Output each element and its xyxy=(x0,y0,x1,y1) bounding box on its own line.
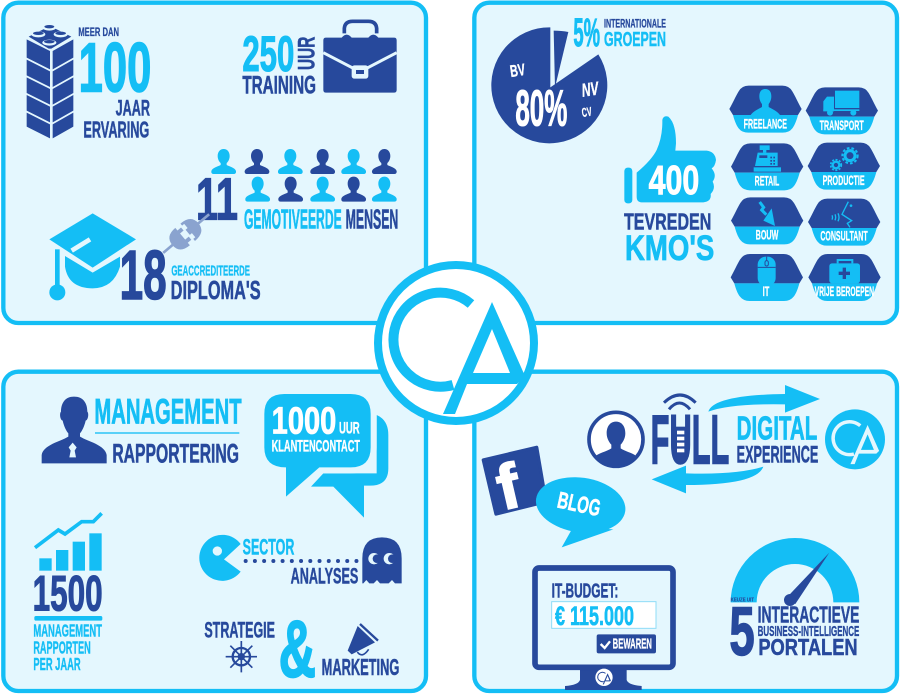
panel: digital xyxy=(474,372,897,691)
text: digital experience: EXPERIENCE xyxy=(737,442,818,469)
chart: pie of company types xyxy=(491,27,607,143)
icon: graduation cap xyxy=(49,213,136,300)
tile: freelance: FREELANCE xyxy=(744,115,787,131)
text: 5% internationale groepen: INTERNATIONALE xyxy=(604,16,666,30)
icon: ship wheel xyxy=(226,641,257,672)
text: 100 jaar ervaring: ERVARING xyxy=(83,116,149,142)
text: 250 uur training: 250 xyxy=(242,26,294,82)
text: 18 geaccrediteerde diploma's: 18 xyxy=(120,236,167,314)
tile: bouw: BOUW xyxy=(756,227,779,243)
icon: gauge xyxy=(731,538,859,606)
tile: bouw xyxy=(731,197,803,244)
panel: reporting xyxy=(3,372,426,694)
text: 1500 management rapporten per jaar: PER JAAR xyxy=(33,654,81,674)
arrow: to left xyxy=(652,466,763,493)
icon: blog bubble: BLOG xyxy=(555,487,603,521)
text: strategie: STRATEGIE xyxy=(204,618,275,643)
text: marketing: MARKETING xyxy=(322,654,399,680)
icon: manager silhouette xyxy=(42,397,107,463)
text: sector analyses with dots: ANALYSES xyxy=(291,563,358,588)
tile: it xyxy=(731,254,803,301)
logo: central CA xyxy=(378,265,534,421)
icon: speech bubbles with 1000 uur klantencontact: 1000 xyxy=(272,399,336,441)
text: tevreden kmo's: KMO'S xyxy=(625,229,714,268)
text: 5% internationale groepen: 5% xyxy=(573,11,600,55)
text: 5 interactieve business-intelligence portalen xyxy=(729,593,859,670)
text: 18 geaccrediteerde diploma's: GEACCREDITEERDE xyxy=(171,264,250,280)
text: 18 geaccrediteerde diploma's xyxy=(120,236,261,314)
tile: retail xyxy=(731,143,803,190)
text: digital experience xyxy=(737,410,818,469)
text: full with tube xyxy=(651,400,729,478)
icon: speech bubbles with 1000 uur klantencontact xyxy=(264,394,388,518)
panel: customers xyxy=(474,3,897,323)
icon: wifi xyxy=(664,395,696,409)
icon: person in circle xyxy=(589,412,643,466)
text: 5% internationale groepen: GROEPEN xyxy=(604,28,666,51)
panel: experience and team xyxy=(3,3,426,323)
tile: consultant xyxy=(808,199,880,246)
icon: plug xyxy=(156,206,216,262)
tile: it: IT xyxy=(763,283,770,299)
chart: pie of company types: 80% xyxy=(515,79,567,136)
icon: monitor with it-budget: IT-BUDGET: xyxy=(552,580,618,602)
arrow: to right xyxy=(708,385,820,413)
text: tevreden kmo's xyxy=(624,208,714,268)
icon: facebook xyxy=(483,447,546,524)
text: 5 interactieve business-intelligence portalen: PORTALEN xyxy=(758,634,858,660)
icon: megaphone xyxy=(348,624,378,655)
text: sector analyses with dots: SECTOR xyxy=(243,534,294,559)
icon: gauge: KEUZE UIT xyxy=(731,597,754,603)
icon: facebook: f xyxy=(490,451,528,524)
icon: monitor with it-budget xyxy=(535,568,673,690)
text: 1500 management rapporten per jaar xyxy=(33,566,103,674)
chart: pie of company types: BV xyxy=(509,60,526,81)
tile: productie xyxy=(808,143,880,190)
text: 1500 management rapporten per jaar: 1500 xyxy=(33,566,103,622)
panel: experience and team: MENSEN xyxy=(346,203,398,234)
icon: thumbs up with 400 xyxy=(624,116,716,203)
text: 100 jaar ervaring: JAAR xyxy=(116,96,150,121)
chart: pie of company types: NV xyxy=(580,77,601,101)
chart: growth bars xyxy=(35,513,102,571)
text: digital experience: DIGITAL xyxy=(737,410,817,447)
chart: pie of company types: CV xyxy=(581,105,593,120)
ampersand: & xyxy=(279,605,316,694)
icon: pacman xyxy=(199,535,241,581)
icon: ghost xyxy=(362,537,402,583)
tile: transport xyxy=(806,87,878,134)
text: 250 uur training: UUR xyxy=(293,37,320,70)
text: 18 geaccrediteerde diploma's: DIPLOMA'S xyxy=(171,275,261,305)
panel: digital: FULL xyxy=(651,400,729,478)
icon: blog bubble xyxy=(532,472,629,547)
text: 5% internationale groepen xyxy=(573,11,666,55)
icon: monitor with it-budget: € 115.000 xyxy=(555,601,634,631)
logo: small CA xyxy=(825,409,885,469)
text: 1500 management rapporten per jaar: RAPPORTEN xyxy=(33,637,91,657)
text: 11 gemotiveerde mensen xyxy=(196,165,398,234)
text: 5 interactieve business-intelligence portalen: 5 xyxy=(729,593,755,670)
text: tevreden kmo's: TEVREDEN xyxy=(624,208,711,234)
text: management rapportering: RAPPORTERING xyxy=(112,438,239,468)
text: 11 gemotiveerde mensen: GEMOTIVEERDE xyxy=(244,203,342,234)
icon: briefcase xyxy=(323,21,397,93)
icon: speech bubbles with 1000 uur klantencontact: KLANTENCONTACT xyxy=(272,437,360,456)
icon: thumbs up with 400: 400 xyxy=(649,157,699,203)
text: 250 uur training: TRAINING xyxy=(242,71,316,99)
tile: retail: RETAIL xyxy=(755,172,780,188)
text: management rapportering xyxy=(94,392,242,468)
text: sector analyses with dots xyxy=(243,534,358,588)
text: 11 gemotiveerde mensen: 11 xyxy=(196,165,238,232)
icon: eleven people xyxy=(211,149,397,202)
icon: speech bubbles with 1000 uur klantencontact: UUR xyxy=(339,418,360,437)
icon: brick tower xyxy=(27,25,73,138)
text: 100 jaar ervaring: 100 xyxy=(79,29,151,107)
text: 100 jaar ervaring: MEER DAN xyxy=(78,25,119,39)
tile: freelance xyxy=(729,86,802,133)
text: management rapportering: MANAGEMENT xyxy=(94,392,242,431)
text: 100 jaar ervaring xyxy=(78,25,151,142)
tile: vrije beroepen xyxy=(808,254,881,301)
icon: monitor with it-budget: BEWAREN xyxy=(613,637,652,653)
text: 1500 management rapporten per jaar: MANAGEMENT xyxy=(33,621,102,641)
